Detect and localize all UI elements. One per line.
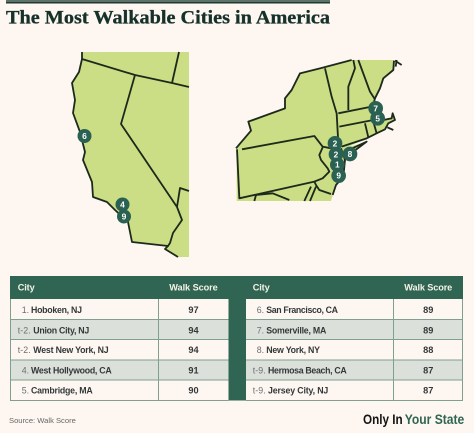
row: San Francisco: 89	[423, 305, 433, 315]
table: walk score rankings	[10, 276, 463, 400]
marker: 4 West Hollywood	[116, 198, 130, 212]
row: Somerville: 7.	[257, 325, 264, 335]
marker: 5 Cambridge	[370, 111, 385, 126]
row: Hermosa Beach: 87	[423, 365, 433, 375]
row: West Hollywood: 91	[188, 365, 199, 375]
marker: 6 San Francisco: 6	[82, 131, 87, 141]
row: New York: New York, NY	[266, 345, 320, 355]
marker: 9 Hermosa Beach: 9	[122, 212, 127, 222]
row: Hoboken: Hoboken, NJ	[31, 305, 82, 315]
row: Somerville: 89	[423, 325, 433, 335]
map: California	[72, 52, 189, 257]
map: Northeast	[236, 60, 402, 201]
row: West New York: West New York, NJ	[33, 345, 109, 355]
marker: 2 Union City	[329, 147, 343, 162]
row: Somerville	[257, 325, 433, 335]
row: Somerville: Somerville, MA	[266, 325, 327, 335]
marker: 8 New York: 8	[348, 149, 353, 159]
row: Hoboken: 97	[188, 305, 199, 315]
marker: 7 Somerville	[368, 101, 383, 116]
table background rows	[10, 276, 463, 400]
row: New York: 8.	[257, 345, 264, 355]
marker: 1 Hoboken: 1	[335, 160, 340, 170]
row: Hoboken	[22, 305, 199, 315]
row: New York: 88	[423, 345, 433, 355]
marker: 9 Jersey City: 9	[336, 171, 341, 181]
logo: Only In Your State	[363, 412, 465, 427]
row: Hermosa Beach: Hermosa Beach, CA	[268, 365, 347, 375]
marker: 2 West New York	[328, 136, 342, 151]
row: San Francisco: San Francisco, CA	[266, 305, 339, 315]
marker: 9 Hermosa Beach	[117, 210, 131, 224]
row: Cambridge: Cambridge, MA	[31, 386, 93, 396]
row: West New York: t-2.	[18, 345, 31, 355]
row: Hermosa Beach	[253, 365, 433, 375]
table header: City	[18, 282, 36, 292]
marker: 9 Jersey City	[331, 168, 346, 183]
row: Jersey City	[253, 386, 433, 396]
row: San Francisco	[257, 305, 433, 315]
marker: 5 Cambridge: 5	[375, 113, 380, 123]
marker: 4 West Hollywood: 4	[120, 200, 125, 210]
title: The Most Walkable Cities in America	[6, 8, 330, 28]
marker: 8 New York	[343, 147, 357, 161]
row: Jersey City: 87	[423, 386, 433, 396]
logo: Only In Your State: Only In	[363, 412, 403, 427]
row: West Hollywood: West Hollywood, CA	[31, 365, 112, 375]
marker: 1 Hoboken	[330, 157, 345, 172]
marker: 7 Somerville: 7	[373, 103, 378, 113]
table header: Walk Score	[404, 282, 452, 292]
row: New York	[257, 345, 433, 355]
row: Cambridge	[22, 386, 199, 396]
row: Jersey City: t-9.	[253, 386, 266, 396]
marker: 6 San Francisco	[78, 129, 92, 143]
marker: 2 West New York: 2	[333, 138, 338, 148]
row: San Francisco: 6.	[257, 305, 264, 315]
row: Union City	[18, 325, 199, 335]
row: West Hollywood	[22, 365, 199, 375]
row: West New York: 94	[188, 345, 199, 355]
row: West Hollywood: 4.	[22, 365, 29, 375]
row: Hoboken: 1.	[22, 305, 29, 315]
row: Union City: 94	[188, 325, 199, 335]
row: Jersey City: Jersey City, NJ	[268, 386, 328, 396]
row: Union City: Union City, NJ	[33, 325, 89, 335]
row: Union City: t-2.	[18, 325, 31, 335]
marker: 2 Union City: 2	[334, 149, 339, 159]
table header: Walk Score	[169, 282, 218, 292]
source note: Source: Walk Score	[9, 416, 76, 425]
logo: Only In Your State: Your State	[405, 412, 465, 427]
table header: City	[253, 282, 271, 292]
row: Cambridge: 90	[188, 386, 199, 396]
table header	[18, 282, 452, 292]
row: West New York	[18, 345, 199, 355]
row: Hermosa Beach: t-9.	[253, 365, 266, 375]
row: Cambridge: 5.	[22, 386, 29, 396]
